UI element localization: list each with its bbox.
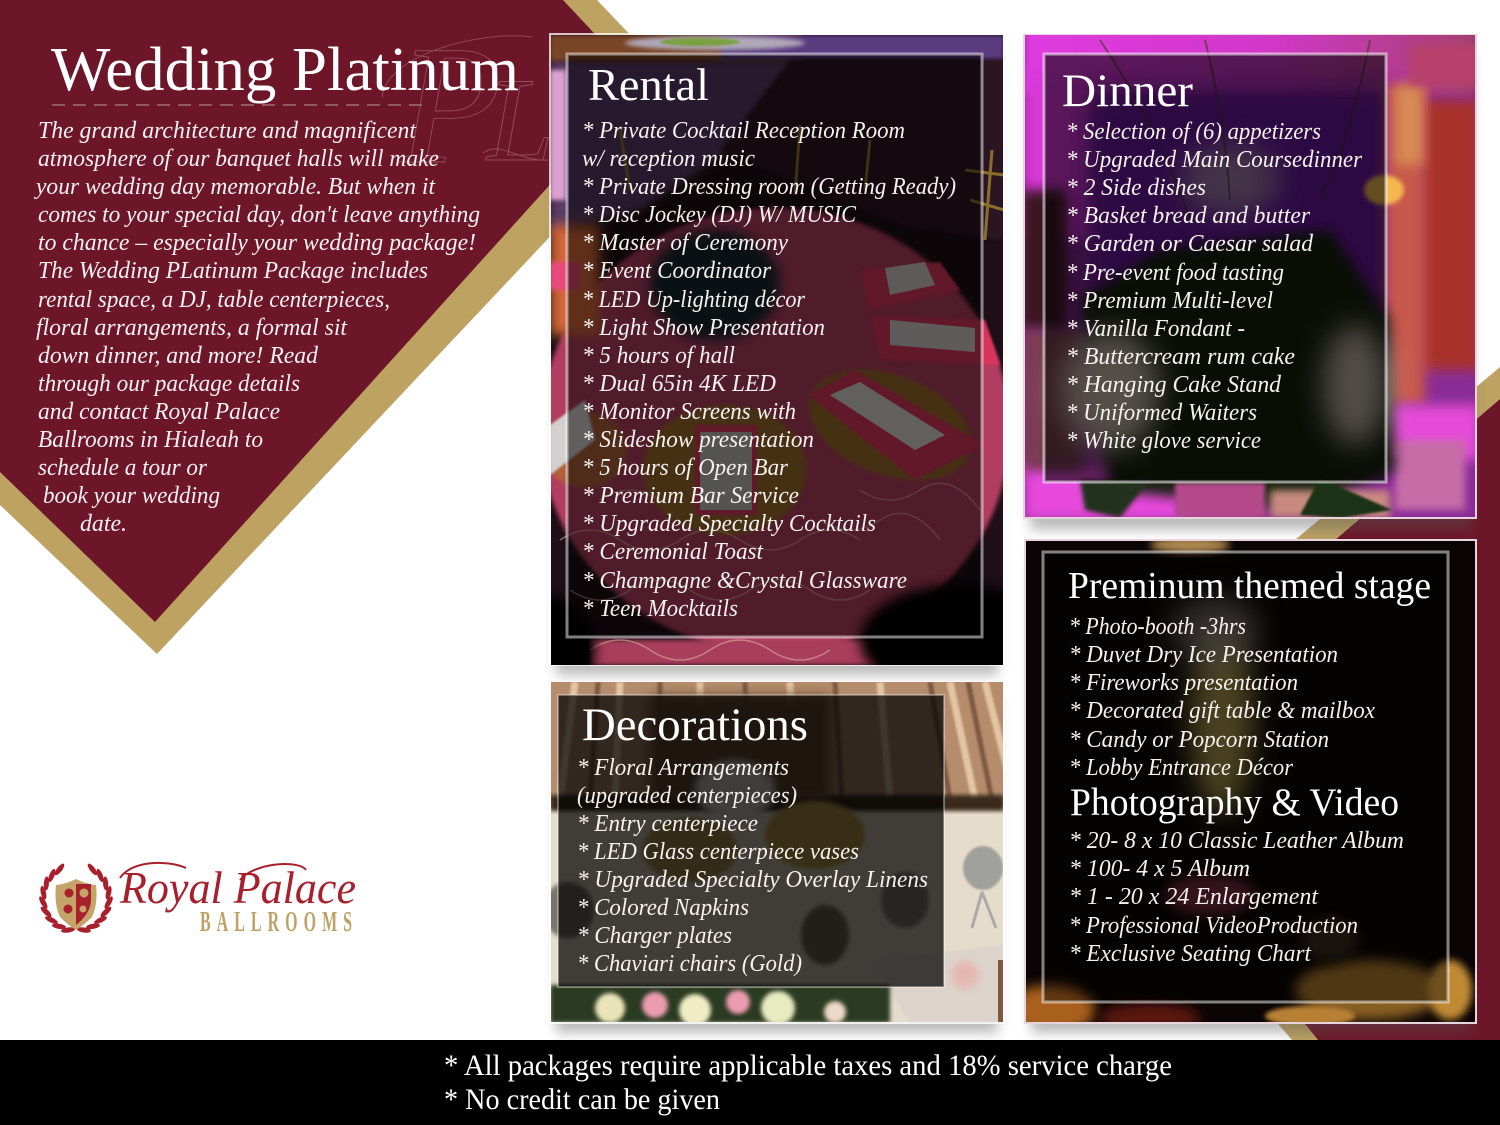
intro paragraph: Ballrooms in Hialeah to	[38, 426, 263, 453]
list: decorations items: * Charger plates	[577, 922, 732, 949]
icon: laurel wreath crest	[38, 862, 114, 934]
list: stage items: * Duvet Dry Ice Presentation	[1069, 641, 1338, 668]
intro paragraph: The Wedding PLatinum Package includes	[38, 257, 428, 284]
list: dinner items: * Garden or Caesar salad	[1066, 230, 1314, 257]
list: decorations items: * Upgraded Specialty Overlay Linens	[577, 866, 928, 893]
intro paragraph	[33, 117, 480, 537]
panel: rental	[549, 33, 1004, 681]
list: dinner items: * White glove service	[1066, 427, 1261, 454]
photo: head table	[542, 682, 1010, 1026]
heading: premium themed stage: Preminum themed stage	[1068, 565, 1431, 607]
list: stage items: * Candy or Popcorn Station	[1069, 726, 1329, 753]
list: stage items: * Lobby Entrance Décor	[1069, 754, 1293, 781]
gold band top-left chevron	[0, 0, 640, 654]
title: Wedding Platinum	[51, 36, 519, 104]
list: stage items: * Decorated gift table & mailbox	[1069, 697, 1375, 724]
intro paragraph: and contact Royal Palace	[38, 398, 280, 425]
overlay box	[1044, 54, 1386, 482]
list: rental items: * Upgraded Specialty Cocktails	[582, 510, 876, 537]
intro paragraph: The grand architecture and magnificent	[38, 117, 417, 144]
list: rental items: * Teen Mocktails	[582, 595, 738, 622]
list: stage items: * Fireworks presentation	[1069, 669, 1298, 696]
watermark monogram: L	[485, 53, 554, 186]
list: dinner items: * Selection of (6) appetizers	[1066, 118, 1321, 145]
list: rental items: * Private Dressing room (Getting Ready)	[582, 173, 956, 200]
heading: rental: Rental	[588, 59, 709, 110]
photo: floral centerpiece	[1020, 25, 1480, 520]
list: dinner items: * Pre-event food tasting	[1066, 259, 1284, 286]
list: rental items: * Slideshow presentation	[582, 426, 814, 453]
list: decorations items: * Colored Napkins	[577, 894, 749, 921]
list: rental items: * Premium Bar Service	[582, 482, 799, 509]
list: photography items: * 100- 4 x 5 Album	[1069, 855, 1250, 882]
list: decorations items: * Floral Arrangements	[577, 754, 789, 781]
list: dinner items: * Upgraded Main Coursedinner	[1066, 146, 1362, 173]
list: rental items: * 5 hours of hall	[582, 342, 735, 369]
photo: sparklers and flowers	[1005, 537, 1476, 1035]
watermark monogram: P	[397, 11, 502, 199]
maroon chevron panel	[0, 0, 640, 622]
maroon right panel	[1100, 399, 1500, 1040]
intro paragraph: your wedding day memorable. But when it	[33, 173, 436, 200]
intro paragraph: book your wedding	[43, 482, 220, 509]
watermark monogram	[382, 11, 554, 199]
list: stage items: * Photo-booth -3hrs	[1069, 613, 1246, 640]
footer bar	[0, 1040, 1500, 1125]
intro paragraph: schedule a tour or	[38, 454, 207, 481]
intro paragraph: rental space, a DJ, table centerpieces,	[38, 286, 390, 313]
panel: decorations	[542, 681, 1010, 1033]
list: decorations items	[577, 754, 928, 977]
list: dinner items: * Basket bread and butter	[1066, 202, 1310, 229]
overlay box	[1043, 552, 1448, 1002]
footer note: * All packages require applicable taxes and 18% service charge	[444, 1049, 1172, 1082]
list: rental items: * Event Coordinator	[582, 257, 771, 284]
list: rental items: * LED Up-lighting décor	[582, 286, 805, 313]
list: rental items: * Private Cocktail Reception Room	[582, 117, 905, 144]
heading: photography and video: Photography & Video	[1070, 781, 1399, 824]
intro paragraph: through our package details	[38, 370, 300, 397]
overlay box	[567, 54, 982, 637]
list: photography items: * 20- 8 x 10 Classic Leather Album	[1069, 827, 1404, 854]
list: decorations items: * LED Glass centerpiece vases	[577, 838, 859, 865]
list: rental items: * Disc Jockey (DJ) W/ MUSIC	[582, 201, 857, 228]
logo: Royal Palace Ballrooms: BALLROOMS	[200, 906, 358, 938]
list: stage items	[1069, 613, 1375, 781]
panel: premium themed stage and photography	[1005, 537, 1477, 1035]
list: rental items: * Master of Ceremony	[582, 229, 788, 256]
list: photography items: * Professional VideoProduction	[1069, 912, 1358, 939]
list: rental items	[582, 117, 956, 622]
list: rental items: * Light Show Presentation	[582, 314, 825, 341]
footer note: * No credit can be given	[444, 1083, 720, 1116]
list: photography items	[1069, 827, 1404, 967]
list: rental items: * Monitor Screens with	[582, 398, 796, 425]
intro paragraph: comes to your special day, don't leave anything	[38, 201, 480, 228]
intro paragraph: down dinner, and more! Read	[38, 342, 319, 369]
intro paragraph: floral arrangements, a formal sit	[36, 314, 348, 341]
list: rental items: * Champagne &Crystal Glassware	[582, 567, 907, 594]
list: rental items: * Dual 65in 4K LED	[582, 370, 776, 397]
list: dinner items: * Hanging Cake Stand	[1066, 371, 1282, 398]
list: decorations items: * Chaviari chairs (Gold)	[577, 950, 802, 977]
footer note	[444, 1049, 1172, 1116]
list: dinner items: * Premium Multi-level	[1066, 287, 1273, 314]
list: dinner items: * 2 Side dishes	[1066, 174, 1206, 201]
intro paragraph: to chance – especially your wedding package!	[38, 229, 476, 256]
heading: dinner: Dinner	[1062, 65, 1193, 117]
gold band right	[1060, 367, 1500, 1040]
logo: Royal Palace Ballrooms	[38, 862, 358, 938]
list: dinner items	[1066, 118, 1362, 454]
list: photography items: * 1 - 20 x 24 Enlargement	[1069, 883, 1319, 910]
list: dinner items: * Uniformed Waiters	[1066, 399, 1257, 426]
logo: Royal Palace Ballrooms: Royal Palace	[119, 862, 356, 913]
panel: dinner	[1020, 25, 1480, 530]
intro paragraph: date.	[80, 510, 127, 537]
list: dinner items: * Buttercream rum cake	[1066, 343, 1295, 370]
list: rental items: * Ceremonial Toast	[582, 538, 764, 565]
intro paragraph: atmosphere of our banquet halls will make	[38, 145, 439, 172]
list: rental items: w/ reception music	[582, 145, 755, 172]
list: decorations items: (upgraded centerpieces)	[577, 782, 797, 809]
list: photography items: * Exclusive Seating Chart	[1069, 940, 1312, 967]
list: dinner items: * Vanilla Fondant -	[1066, 315, 1245, 342]
list: rental items: * 5 hours of Open Bar	[582, 454, 788, 481]
photo: banquet table	[551, 35, 1003, 665]
overlay box	[558, 695, 944, 987]
list: decorations items: * Entry centerpiece	[577, 810, 758, 837]
heading: decorations: Decorations	[582, 699, 808, 751]
